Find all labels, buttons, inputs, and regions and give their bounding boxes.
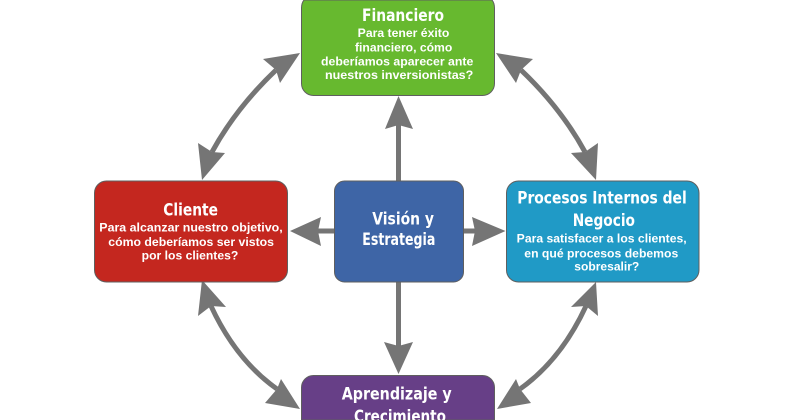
text: procesos question: Para satisfacer a los clientes, [517, 232, 687, 246]
arrow: financiero to cliente [198, 53, 300, 180]
text: procesos question [517, 232, 687, 274]
heading: cliente: Cliente [163, 200, 218, 220]
text: financiero question [321, 26, 474, 82]
text: financiero question: Para tener éxito [358, 26, 449, 40]
text: procesos question: sobresalir? [574, 260, 639, 274]
panel: procesos internos [506, 181, 699, 282]
text: procesos question: en qué procesos debemos [524, 246, 679, 260]
heading: aprendizaje: Aprendizaje y [342, 384, 452, 404]
text: financiero question: financiero, cómo [355, 40, 452, 54]
panel: cliente [94, 181, 288, 282]
text: cliente question: cómo deberíamos ser vistos [108, 235, 274, 249]
text: financiero question: deberíamos aparecer ante [321, 54, 474, 68]
arrow: procesos to aprendizaje [497, 282, 598, 409]
text: cliente question: por los clientes? [142, 248, 238, 262]
panel: aprendizaje [302, 376, 494, 420]
text: financiero question: nuestros inversionistas? [325, 68, 473, 82]
arrow: vision to financiero [385, 96, 413, 181]
panel: vision y estrategia [334, 181, 464, 282]
arrow: vision to aprendizaje [384, 282, 413, 374]
heading: vision: Visión y [372, 209, 434, 229]
heading: financiero: Financiero [362, 6, 444, 26]
panel: financiero [302, 0, 494, 96]
heading: estrategia: Estrategia [362, 230, 435, 250]
arrow: vision to cliente [290, 217, 334, 246]
heading: procesos internos: Procesos Internos del [517, 188, 687, 208]
text: cliente question [99, 221, 283, 262]
heading: negocio: Negocio [573, 211, 635, 231]
text: cliente question: Para alcanzar nuestro objetivo, [99, 221, 283, 235]
arrow: financiero to procesos [496, 53, 598, 180]
arrow: vision to procesos [463, 217, 506, 246]
arrow: cliente to aprendizaje [198, 280, 300, 409]
